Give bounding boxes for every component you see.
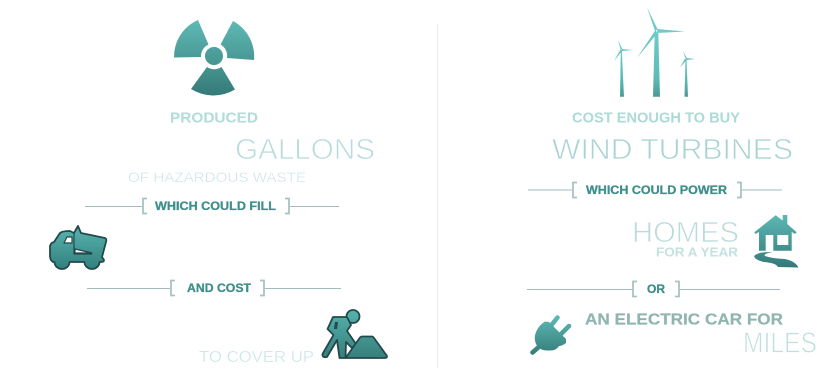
text: an electric car for: AN ELECTRIC CAR FOR [585,312,783,329]
divider label: or [527,282,780,296]
text: for a year: FOR A YEAR [656,244,739,260]
heading: cost enough to buy: COST ENOUGH TO BUY [572,110,740,126]
divider label: which could fill [85,198,339,214]
heading: homes: HOMES [632,217,739,249]
icon: electric plug [532,318,569,352]
icon: house with path [754,215,798,268]
heading: produced: PRODUCED [170,110,258,126]
heading: miles: MILES [743,328,817,360]
text: to cover up: TO COVER UP [199,349,314,366]
divider label: or: OR [647,284,666,296]
icon: wind turbines [614,8,696,97]
icon: worker with shovel [322,310,387,358]
divider label: and cost: AND COST [187,283,251,295]
divider label: which could power [528,182,782,198]
heading: gallons: GALLONS [235,134,375,166]
icon: radiation symbol [174,20,254,95]
heading: wind turbines: WIND TURBINES [552,134,793,166]
icon: dump truck [50,226,106,269]
divider label: and cost [87,280,341,296]
divider label: which could power: WHICH COULD POWER [586,185,728,197]
panel: wind turbines [527,8,817,360]
panel: hazardous waste [50,20,387,366]
divider label: which could fill: WHICH COULD FILL [155,201,276,213]
center divider [436,24,438,368]
text: of hazardous waste: OF HAZARDOUS WASTE [128,169,306,185]
